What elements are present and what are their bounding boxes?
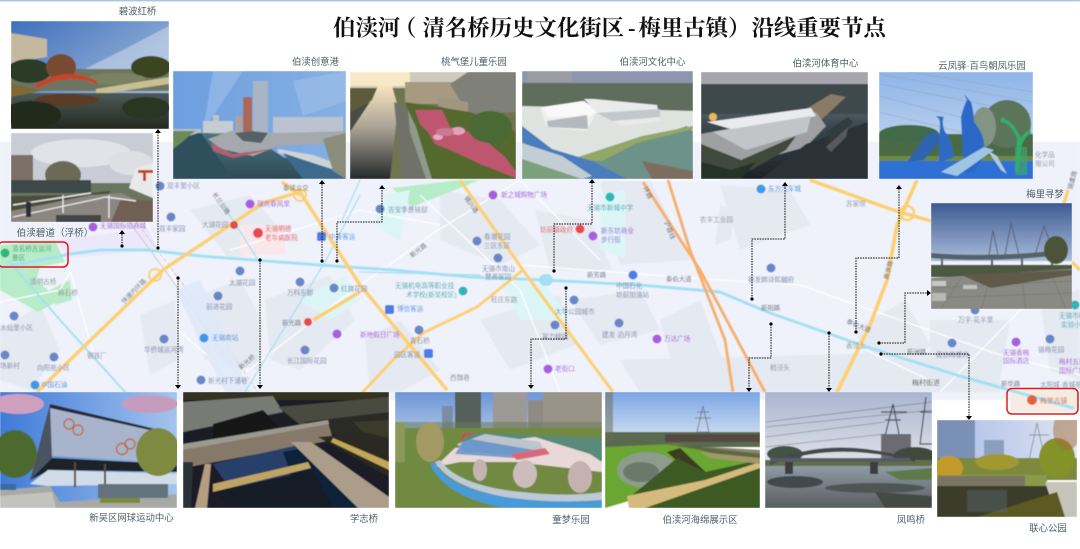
map: road labels: 沪蓉线 — [662, 219, 678, 241]
caption: 云凤驿·百鸟朝凤乐园: 云凤驿·百鸟朝凤乐园 — [938, 60, 1026, 71]
title: - — [628, 16, 635, 40]
caption: 联心公园: 联心公园 — [1029, 522, 1067, 534]
photo: 童梦乐园 — [395, 392, 602, 508]
map: yellow main roads — [37, 180, 1080, 395]
map: place labels: 旺庄东路 — [491, 295, 518, 304]
map: road labels: 锡兴路 — [462, 194, 481, 215]
arrow: 碧波红桥 — [155, 129, 161, 250]
map: scenic area pin 1: 景区 — [12, 254, 26, 262]
map: place labels: 苏家坝 — [846, 199, 866, 208]
map: scenic area pin 1 — [0, 244, 52, 262]
red callout: 梅里古镇 — [1007, 388, 1078, 414]
arrow: 网球运动中心 — [175, 276, 181, 389]
map: place labels: 无锡机电高等职业技 — [395, 281, 455, 290]
arrow: 桃气堡 — [335, 185, 385, 263]
caption: 学志桥: 学志桥 — [350, 513, 379, 524]
photo: 桃气堡儿童乐园 — [350, 72, 516, 179]
arrow: 浮桥 — [119, 230, 125, 248]
map: place labels: 西魏巷 — [450, 373, 470, 382]
map: place labels: 富力桃园 — [542, 332, 569, 341]
map: place labels: 梢泾头 — [770, 363, 790, 372]
map: place labels: 步行街 — [601, 235, 621, 244]
map: white minor roads — [0, 180, 1080, 392]
caption: 伯渎创意港: 伯渎创意港 — [292, 56, 340, 67]
map: road labels: 新光路 — [408, 240, 429, 260]
map: road labels: 高浪路 — [881, 259, 895, 281]
map: place labels: 大湖花园 — [202, 220, 229, 229]
arrow: 海绵展示区 — [746, 322, 773, 392]
map: place labels: 限公司 — [1035, 159, 1055, 168]
map: place labels: 建发·泊月湾 — [602, 330, 638, 339]
map: place labels: 农丰工业园 — [700, 215, 733, 224]
photo: 云凤驿百鸟朝凤乐园 — [879, 72, 1033, 179]
map: road labels: 新光路 — [282, 318, 302, 327]
caption: 碧波红桥: 碧波红桥 — [119, 6, 157, 16]
map: scenic area pin 2: 梅里古镇 — [1040, 396, 1067, 405]
caption: 梅里寻梦: 梅里寻梦 — [1026, 188, 1064, 200]
map: place labels: 梅村街道 — [912, 378, 940, 387]
photo: 伯渎河文化中心 — [522, 71, 693, 179]
photo: 梅里寻梦 — [931, 203, 1072, 309]
map: road labels — [119, 169, 1079, 388]
map: place labels: 新发朗诗熙樾府 — [748, 275, 795, 284]
title: ） — [728, 16, 750, 40]
map: place labels: 青石桥 — [410, 336, 430, 345]
photo: 伯渎创意港 — [173, 71, 346, 179]
red callout: 清名桥古运河景区 — [0, 242, 68, 267]
arrow: 联心公园 — [879, 352, 972, 420]
map: place labels: 钢铁厂 — [87, 351, 107, 360]
map: road labels: 环路 — [641, 185, 655, 201]
map: place labels: 国际酒店 — [1003, 356, 1030, 365]
map: place labels: 瑞尚春风里 — [257, 199, 290, 208]
arrow: 凤鸣桥 — [826, 331, 832, 392]
map: road labels: 泰读立交 — [283, 183, 309, 192]
map: place labels: 博信客运 — [397, 304, 424, 313]
map: road labels: 新光桥 — [237, 352, 257, 372]
arrows: dashed leader lines — [119, 129, 972, 420]
title: （ — [394, 16, 416, 40]
caption: 伯渎碧道（浮桥）: 伯渎碧道（浮桥） — [17, 227, 93, 239]
map: place labels: 蔬协梅都府 — [936, 350, 969, 359]
map: place labels: 春潮花园 — [484, 232, 511, 241]
photo: 联心公园 — [937, 420, 1077, 517]
map: place labels: 坊前加油站 — [616, 290, 649, 299]
map: place labels: 无锡市新城中学 — [587, 203, 634, 212]
caption: 桃气堡儿童乐园: 桃气堡儿童乐园 — [441, 56, 507, 67]
map: place labels: 太湖花园 — [229, 278, 256, 287]
map: place labels: 向阳苑小区 — [37, 363, 70, 372]
map: background — [0, 142, 1080, 412]
arrow: 体育中心 — [750, 182, 788, 301]
map: pale cyan areas — [300, 190, 625, 320]
photo: 碧波红桥 — [11, 21, 169, 129]
map: road labels: 新华路 — [1001, 379, 1021, 388]
map: place labels: 万达广场 — [664, 334, 691, 343]
caption: 伯渎河文化中心: 伯渎河文化中心 — [620, 56, 686, 67]
map: place labels: 吉宝季景铭邸 — [388, 205, 428, 214]
map: green areas — [0, 180, 480, 312]
map: place labels: 中国石油 — [41, 380, 68, 389]
map: place labels: 新之城购物广场 — [501, 190, 548, 199]
title: 清名桥历史文化街区 — [422, 16, 624, 40]
map: road labels: 新阳路 — [761, 303, 781, 312]
map: place labels: 化学品 — [1035, 150, 1055, 159]
map: place labels: 中青客运 — [329, 232, 356, 241]
map: pale red / purple zones — [240, 225, 285, 255]
map: place labels: 术学校(新吴校区) — [406, 290, 457, 299]
map: place labels: 万科东郡 — [287, 288, 314, 297]
map: place labels: 前进花园 — [206, 302, 233, 311]
arrow: 伯渎创意港 — [319, 180, 325, 263]
map: place labels: 场新村 — [0, 361, 20, 370]
map: place labels: 香泾上 — [846, 341, 866, 350]
map: place labels: 清明古桥 — [30, 277, 57, 286]
photo: 伯渎河海绵展示区 — [605, 392, 760, 508]
map: place labels: 大华公园城市 — [555, 307, 595, 316]
map: place labels: 麻石桥 — [58, 288, 78, 297]
map: road labels: 锡虞路 — [1065, 169, 1079, 191]
map: building blocks — [0, 180, 1080, 392]
caption: 新吴区网球运动中心: 新吴区网球运动中心 — [89, 512, 174, 523]
caption: 伯渎河海绵展示区: 伯渎河海绵展示区 — [662, 514, 738, 525]
map: scenic area pin 1: 清名桥古运河 — [12, 244, 52, 253]
map: place labels: 园区客运 — [394, 350, 421, 359]
photo: 凤鸣桥 — [765, 392, 932, 508]
map: place labels: 中国石化 — [616, 281, 643, 290]
caption: 凤鸣桥: 凤鸣桥 — [897, 514, 926, 525]
arrow: 梅里寻梦 — [877, 290, 931, 345]
map: place labels: 红旗花园 — [341, 284, 368, 293]
map: place labels — [0, 150, 1080, 390]
map: place labels: 无锡南站 — [212, 333, 239, 342]
photo: 伯渎碧道浮桥 — [11, 133, 153, 222]
photo: 新吴区网球运动中心 — [0, 392, 177, 508]
map: place labels: 新地假日广场 — [360, 330, 400, 339]
map: place labels: 三区东区 — [484, 241, 511, 250]
map: road labels: 快速内环路 — [119, 276, 148, 305]
arrow: 学志桥 — [257, 258, 263, 389]
arrow: 云凤驿 — [854, 185, 902, 334]
map: place labels: 长江国际花园 — [287, 356, 327, 365]
map: place labels: 无锡市南山 — [482, 264, 515, 273]
map: scenic area pin 2 — [1027, 395, 1067, 405]
map: place labels: 无锡香梅 — [1003, 348, 1030, 357]
arrow: 童梦乐园 — [528, 286, 568, 389]
map: railway — [128, 220, 258, 392]
caption: 伯渎河体育中心: 伯渎河体育中心 — [793, 58, 859, 68]
map: road labels: 泰伯大道 — [666, 274, 692, 283]
arrow: 文化中心 — [552, 179, 595, 273]
title: 梅里古镇 — [638, 16, 731, 40]
map: place labels: 锡梅花园 — [1038, 345, 1065, 354]
map: place labels: 无锡国际招商城 — [100, 221, 147, 230]
map: place labels: 东方汽车城 — [768, 184, 801, 193]
map: place labels: 无锡明德 — [265, 224, 292, 233]
map: road labels: 泰伯大道 — [845, 317, 873, 335]
map: rivers — [0, 180, 1073, 408]
map: place labels: 老年病医院 — [265, 233, 298, 242]
map: orange expressways — [643, 180, 765, 392]
map: road labels: 长兰公路 — [210, 190, 233, 217]
map: place labels: 水仙里小区 — [0, 323, 33, 332]
top rule — [0, 0, 1080, 1]
map: place labels: 老街口 — [555, 364, 575, 373]
map: place labels: 新光村下浦巷 — [208, 376, 248, 385]
map: place labels: 万宇·花半里 — [958, 315, 994, 324]
photo: 学志桥 — [183, 392, 389, 508]
photo: 伯渎河体育中心 — [701, 72, 868, 179]
title: 伯渎河 — [333, 16, 400, 40]
map: place labels: 华侨城运河湾 — [144, 345, 184, 354]
caption: 童梦乐园: 童梦乐园 — [552, 514, 590, 525]
map: road labels: 新芳路 — [587, 270, 607, 279]
title: 沿线重要节点 — [752, 14, 887, 40]
map: road labels: 新洲路 — [907, 347, 927, 356]
map: place labels: 双丰家园 — [159, 224, 186, 233]
map: place labels: 慧善家园 — [485, 272, 512, 281]
map: place labels: 坊前镇政府 — [540, 225, 573, 234]
map: place labels: 新东坊商业 — [601, 226, 634, 235]
map: place labels: 双丰里小区 — [167, 181, 200, 190]
